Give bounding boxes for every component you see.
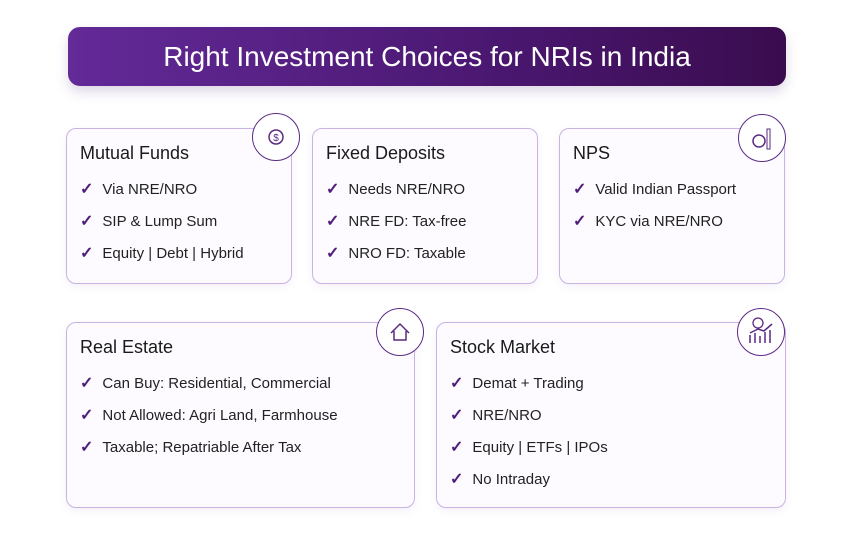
panel: fixed deposits	[312, 128, 538, 284]
panel: stock market	[436, 322, 786, 508]
icon: chart	[737, 308, 785, 356]
item: ✓ Not Allowed: Agri Land, Farmhouse	[80, 407, 338, 424]
item: ✓ Valid Indian Passport	[573, 181, 736, 198]
item: ✓ No Intraday	[450, 471, 550, 488]
heading: fixed deposits: Fixed Deposits	[326, 143, 445, 163]
item: ✓ Taxable; Repatriable After Tax	[80, 439, 301, 456]
icon: house	[376, 308, 424, 356]
heading: real estate: Real Estate	[80, 337, 173, 357]
title	[68, 27, 786, 86]
item: ✓ Needs NRE/NRO	[326, 181, 465, 198]
icon: hands money	[252, 113, 300, 161]
heading: mutual funds: Mutual Funds	[80, 143, 189, 163]
panel: NPS	[559, 128, 785, 284]
item: ✓ SIP & Lump Sum	[80, 213, 217, 230]
item: ✓ Can Buy: Residential, Commercial	[80, 375, 331, 392]
item: ✓ Demat + Trading	[450, 375, 584, 392]
panel: real estate	[66, 322, 415, 508]
heading: NPS: NPS	[573, 143, 610, 163]
icon: coins	[738, 114, 786, 162]
item: ✓ Via NRE/NRO	[80, 181, 197, 198]
item: ✓ KYC via NRE/NRO	[573, 213, 723, 230]
item: ✓ Equity | Debt | Hybrid	[80, 245, 244, 262]
panel: mutual funds	[66, 128, 292, 284]
heading: stock market: Stock Market	[450, 337, 555, 357]
item: ✓ NRO FD: Taxable	[326, 245, 466, 262]
icon: hands money: $	[273, 133, 279, 144]
item: ✓ NRE/NRO	[450, 407, 542, 424]
item: ✓ Equity | ETFs | IPOs	[450, 439, 608, 456]
item: ✓ NRE FD: Tax-free	[326, 213, 466, 230]
title: Right Investment Choices for NRIs in India	[163, 41, 691, 72]
